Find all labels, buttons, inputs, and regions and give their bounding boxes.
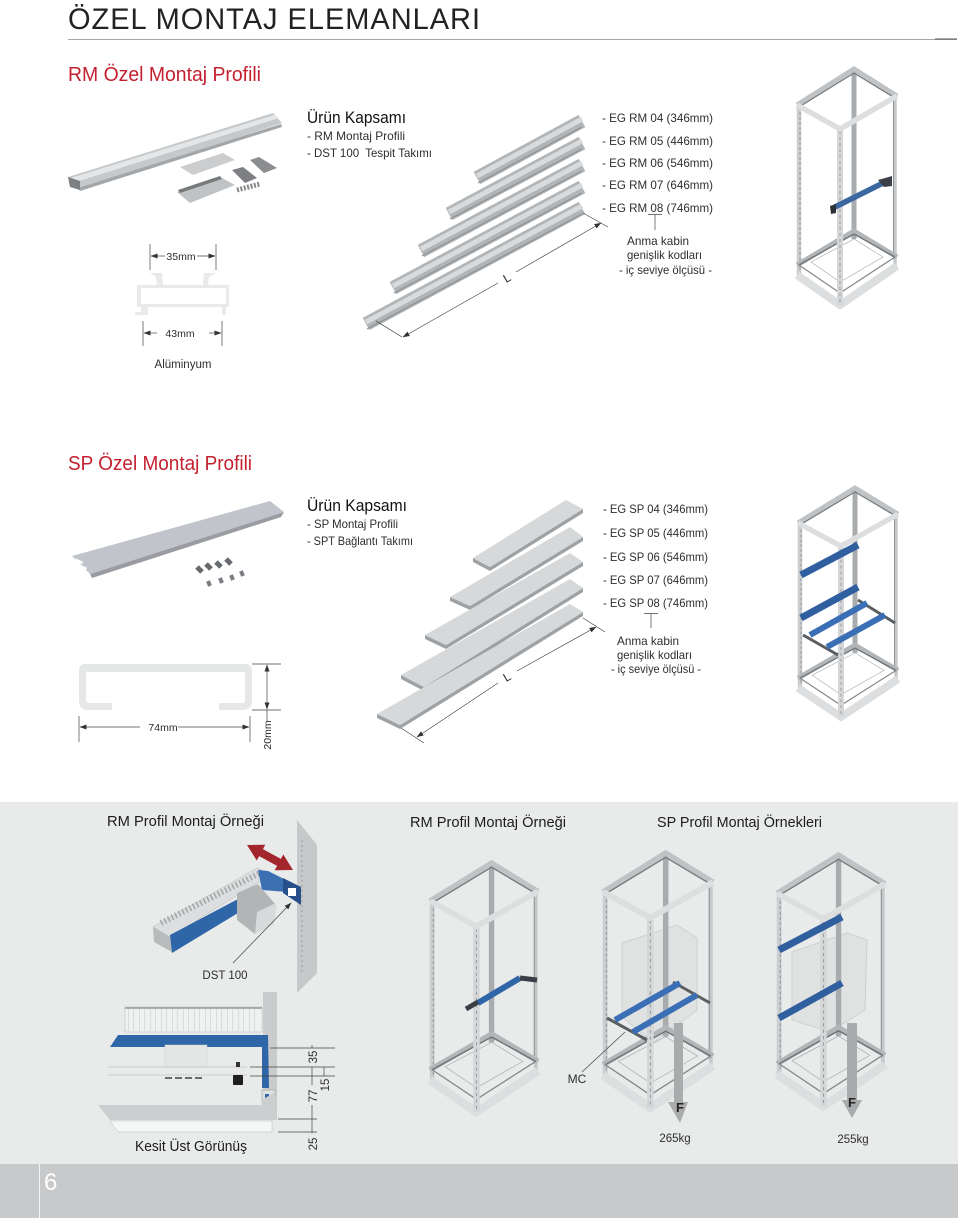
illustration: rail on wall [153,820,317,993]
note: width codes SP: genişlik kodları [617,648,692,662]
model list: RM: - EG RM 07 (646mm) [602,178,713,192]
model list: RM: - EG RM 05 (446mm) [602,134,713,148]
note: width codes RM [619,234,712,277]
arrow: load F [668,1023,688,1123]
header rule [68,38,957,40]
product photo: RM rail and brackets [68,113,282,203]
arrow: double red movement [247,845,293,870]
dimension L: SP [401,618,605,743]
plate set: SP lengths [377,500,583,729]
heading: example 3: SP Profil Montaj Örnekleri [657,813,822,831]
scope list: SP: Ürün Kapsamı [307,497,407,515]
note: width codes SP: - iç seviye ölçüsü - [611,662,701,676]
cabinet: RM mounted [797,69,897,305]
band background [0,802,958,1164]
model list: RM: - EG RM 08 (746mm) [602,201,713,215]
profile scope list [307,109,432,160]
scope list: SP [307,497,413,548]
label: 255kg: 255kg [837,1134,869,1146]
cross section: RM profile: 35mm [166,251,196,263]
rail set: RM lengths [366,119,582,329]
model list: SP [603,502,708,628]
cross section: RM profile: Alüminyum [155,359,211,371]
model list: RM: - EG RM 04 (346mm) [602,111,713,125]
section dimensions: 35 [308,1051,320,1063]
profile scope list: - DST 100 Tespit Takımı [307,146,432,160]
label: MC [568,1032,625,1086]
page number: 6 [44,1169,57,1196]
heading: example 2: RM Profil Montaj Örneği [410,813,566,831]
cross section: SP profile [79,664,281,750]
label: section view: Kesit Üst Görünüş [135,1137,247,1155]
dimension L: SP: L [501,669,514,685]
note: width codes RM: Anma kabin [627,234,689,248]
product photo: SP plate and screws [72,501,284,586]
section dimensions: 25 [308,1138,320,1150]
dimension L [376,213,608,337]
cross section: SP profile: 74mm [148,722,178,734]
model list: SP: - EG SP 05 (446mm) [603,526,708,540]
section dimensions: 15 [320,1079,332,1091]
section dimensions: 77 [308,1090,320,1102]
model list: SP: - EG SP 04 (346mm) [603,502,708,516]
label: DST 100 [202,903,291,982]
label: MC: MC [568,1072,587,1086]
heading: example 1: RM Profil Montaj Örneği [107,812,264,830]
arrow: load F: F [848,1095,856,1110]
title: ÖZEL MONTAJ ELEMANLARI [68,3,481,36]
note: width codes RM: - iç seviye ölçüsü - [619,263,712,277]
model list: SP: - EG SP 07 (646mm) [603,573,708,587]
panel: SP profile [68,453,898,750]
cabinet: example SP wall [777,855,885,1118]
arrow: load F [842,1023,862,1118]
cross section: RM profile: 43mm [165,328,195,340]
note: width codes SP: Anma kabin [617,634,679,648]
dimension L: L [501,270,514,286]
cross section: RM profile [135,244,229,371]
profile scope list: - RM Montaj Profili [307,129,405,143]
cabinet: example rail [430,863,538,1112]
model list: SP: - EG SP 08 (746mm) [603,596,708,610]
arrow: load F: F [676,1100,684,1115]
cabinet: SP mounted [798,488,898,717]
cross section: SP profile: 20mm [262,720,274,750]
model list: RM: - EG RM 06 (546mm) [602,156,713,170]
footer bar [0,1164,958,1218]
panel: mounting examples [0,802,958,1164]
profile scope list: Ürün Kapsamı [307,109,406,127]
note: width codes RM: genişlik kodları [627,248,702,262]
illustration: section top view [98,992,277,1132]
label: 265kg: 265kg [659,1133,691,1145]
scope list: SP: - SPT Bağlantı Takımı [307,534,413,548]
model list: RM [602,111,713,230]
heading: RM: RM Özel Montaj Profili [68,64,261,86]
section dimensions [250,1045,335,1150]
scope list: SP: - SP Montaj Profili [307,517,398,531]
model list: SP: - EG SP 06 (546mm) [603,550,708,564]
panel: RM profile [68,64,897,371]
cabinet: example SP shelf [603,853,713,1123]
label: DST 100: DST 100 [202,970,248,982]
heading: SP: SP Özel Montaj Profili [68,453,252,475]
note: width codes SP [611,634,701,676]
